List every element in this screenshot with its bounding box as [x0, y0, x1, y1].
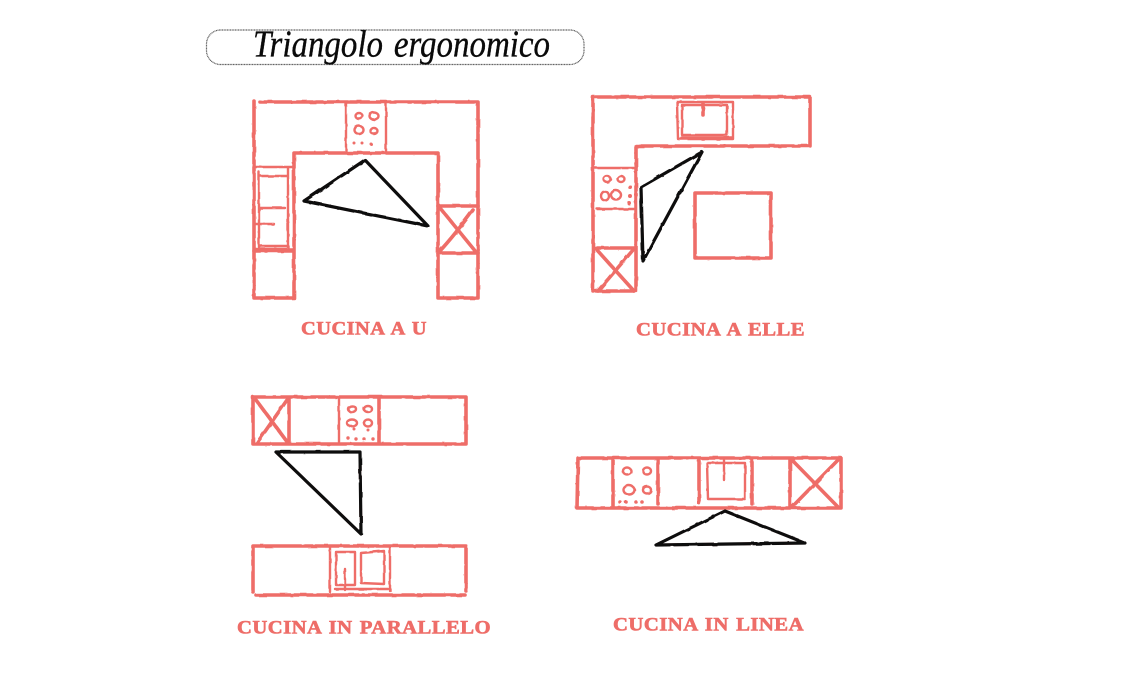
work triangle linear — [656, 511, 805, 545]
icon: hob in U kitchen — [346, 103, 386, 152]
work triangle parallel — [276, 452, 361, 534]
label: cucina a U: CUCINA A U — [301, 320, 427, 340]
icon: hob in linear kitchen — [618, 468, 651, 504]
icon: fridge in parallel kitchen — [256, 398, 289, 443]
panel: cucina in parallelo — [253, 397, 466, 595]
icon: fridge in L kitchen — [594, 248, 635, 291]
icon: double sink — [330, 547, 390, 592]
U-shaped counter outline — [254, 101, 478, 298]
top counter — [253, 397, 466, 444]
icon: sink in L kitchen — [677, 102, 733, 139]
icon: fridge in linear kitchen — [790, 459, 838, 507]
title: Triangolo ergonomico — [253, 24, 550, 66]
label: cucina in parallelo: CUCINA IN PARALLELO — [237, 618, 491, 638]
island — [695, 193, 771, 258]
icon: hob in L kitchen — [595, 168, 634, 209]
label: cucina in linea: CUCINA IN LINEA — [613, 616, 804, 636]
work triangle L — [641, 152, 702, 261]
icon: hob in parallel kitchen — [339, 398, 379, 442]
label: cucina a elle: CUCINA A ELLE — [636, 320, 805, 340]
icon: fridge in U kitchen — [438, 206, 478, 253]
bottom counter — [253, 546, 466, 595]
panel: cucina a elle — [593, 97, 810, 291]
linear counter — [577, 458, 841, 508]
icon: sink in U kitchen — [254, 167, 293, 251]
L-shaped counter outline — [593, 97, 810, 291]
work triangle U — [304, 160, 428, 226]
icon: sink in linear kitchen — [707, 460, 745, 499]
panel: cucina in linea — [577, 458, 841, 545]
panel: cucina a U — [254, 101, 478, 298]
